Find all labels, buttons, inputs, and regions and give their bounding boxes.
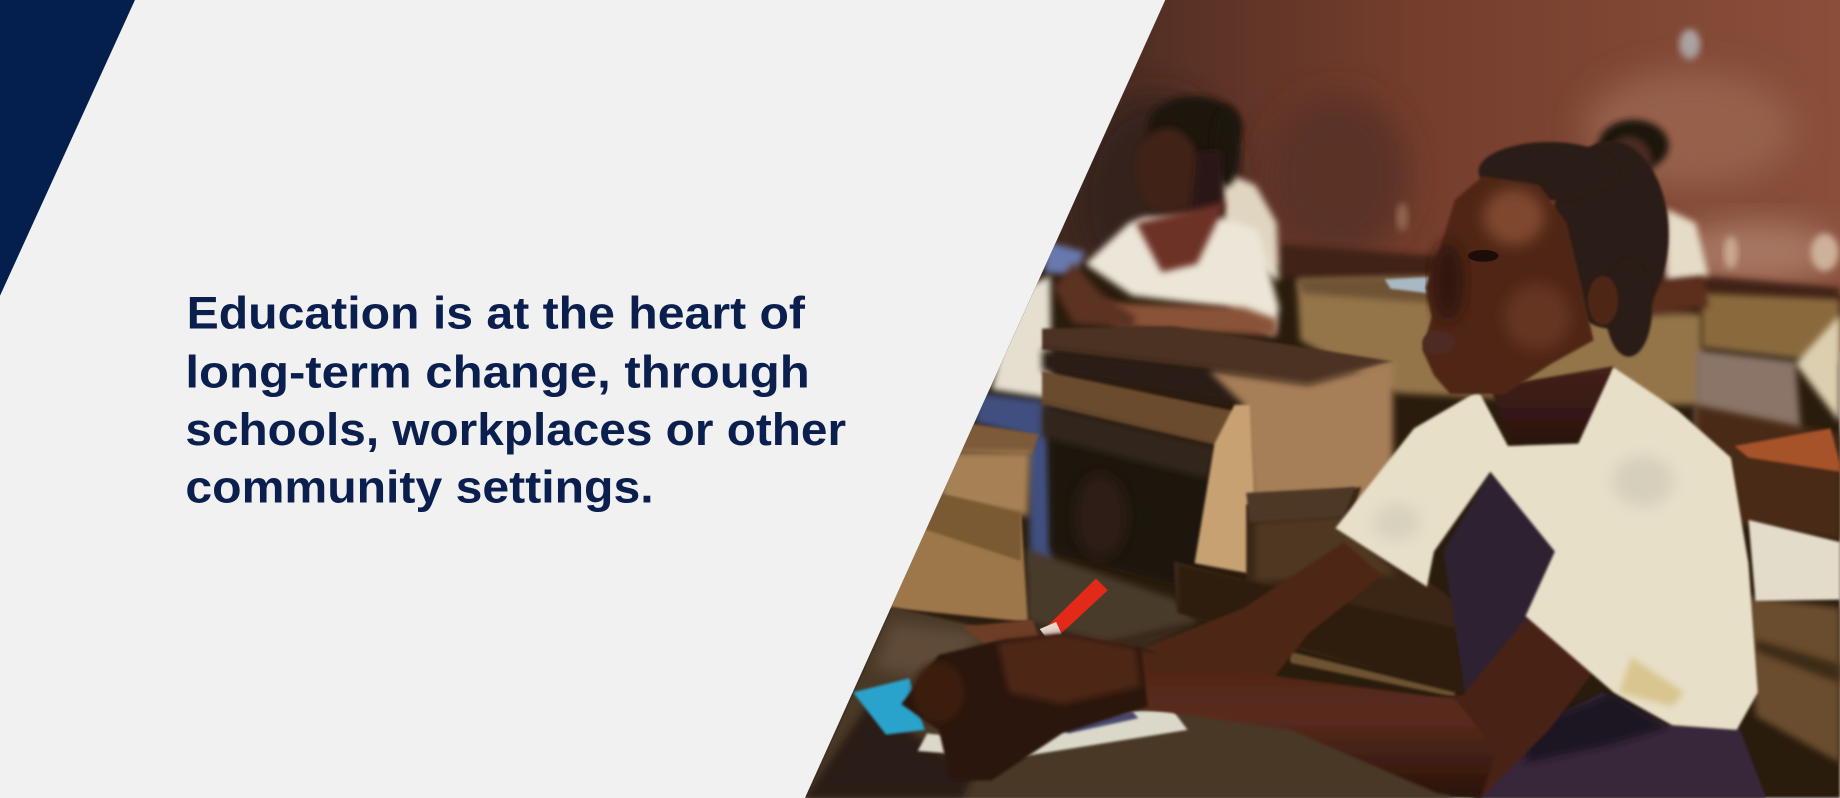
line 4: community settings. bbox=[185, 461, 654, 512]
front desk bbox=[805, 607, 1455, 798]
line 1: Education is at the heart of bbox=[187, 288, 806, 339]
dress bbox=[1443, 473, 1766, 798]
back forearm bbox=[1144, 542, 1382, 678]
books on desk bbox=[853, 678, 1188, 758]
back desks and ledge bbox=[1279, 244, 1840, 540]
standing figure bbox=[974, 276, 1051, 572]
main student neck bbox=[1492, 364, 1614, 440]
main student head bbox=[1422, 141, 1669, 394]
main desk and bench behind student bbox=[1173, 487, 1479, 697]
navy corner shape bbox=[0, 0, 135, 296]
background student right bbox=[1598, 120, 1709, 315]
dark room base bbox=[798, 264, 1840, 798]
left benches and floor bbox=[889, 422, 1199, 645]
headline text bbox=[185, 288, 846, 512]
front forearm bbox=[1127, 648, 1496, 798]
red pen bbox=[1040, 579, 1108, 638]
upper arm bbox=[1437, 619, 1592, 798]
blouse bbox=[1335, 367, 1758, 730]
line 2: long-term change, through bbox=[185, 346, 810, 397]
wall bbox=[1006, 0, 1840, 352]
right desk and open book bbox=[1748, 520, 1840, 763]
classroom photograph bbox=[798, 0, 1840, 798]
background student left bbox=[1044, 96, 1279, 336]
line 3: schools, workplaces or other bbox=[185, 404, 846, 455]
clasped hands bbox=[901, 620, 1148, 780]
middle desk bbox=[1042, 326, 1393, 583]
